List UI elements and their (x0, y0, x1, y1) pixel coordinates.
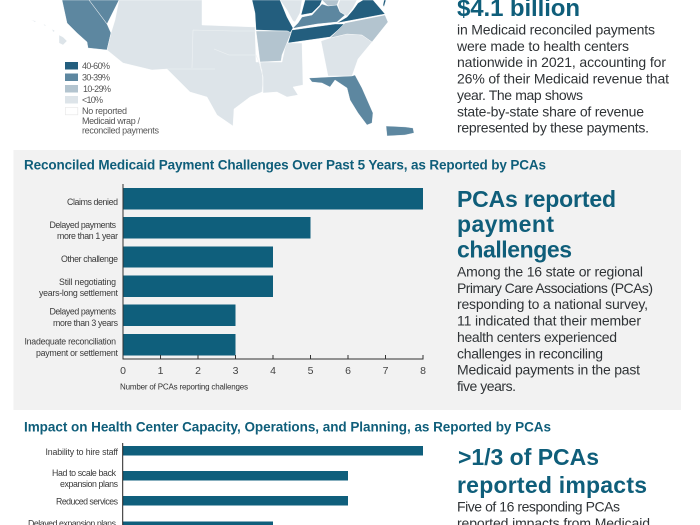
bar chart: impacts (28, 443, 423, 525)
axis numbers: 6 (345, 365, 351, 377)
callout heading (457, 444, 647, 498)
axis numbers: 8 (420, 365, 426, 377)
legend: no reported payments: Medicaid wrap / (82, 116, 140, 126)
category labels: Other challenge (61, 254, 118, 264)
callout body text: 26% of their Medicaid revenue that (457, 70, 669, 86)
map: Hawaii small islands (31, 20, 55, 32)
bars (123, 446, 423, 525)
category labels: Still negotiating (59, 277, 116, 287)
callout: $4.1 billion (456, 0, 669, 136)
bar chart: payment challenges (24, 184, 426, 392)
axis numbers: 7 (383, 365, 389, 377)
legend: map shares (65, 61, 160, 136)
map: western and southern low-share states (107, 0, 263, 126)
map: Virginia eastern shore (383, 0, 386, 7)
callout: PCAs reported payment challenges (457, 186, 653, 394)
callout body text: Primary Care Associations (PCAs) (457, 280, 653, 296)
category labels: more than 1 year (57, 231, 118, 241)
category labels (24, 197, 119, 358)
callout body text (457, 263, 653, 394)
callout body text: challenges in reconciling (457, 345, 603, 361)
map: Arkansas (256, 31, 291, 62)
map: North Carolina (330, 15, 388, 42)
callout heading: payment (457, 211, 554, 237)
axis numbers: 0 (120, 365, 126, 377)
category labels: payment or settlement (36, 348, 119, 358)
category labels: years-long settlement (39, 288, 119, 298)
heading: impact chart: Impact on Health Center Capacity, Operations, and Planning, as Reported by PCAs (24, 420, 551, 434)
map: Hawaii big island (59, 35, 67, 45)
axis numbers: 1 (158, 365, 164, 377)
callout body text: in Medicaid reconciled payments (457, 22, 655, 38)
legend: no reported payments (65, 106, 160, 136)
map: Kentucky (293, 4, 345, 28)
callout body text: state-by-state share of revenue (457, 103, 644, 119)
map: state share of revenue (31, 0, 414, 136)
callout body text: Among the 16 state or regional (457, 263, 643, 279)
category labels: more than 3 years (53, 318, 119, 328)
map: Illinois (280, 0, 302, 22)
callout heading: challenges (457, 236, 572, 262)
category labels: Reduced services (56, 496, 119, 506)
legend: no reported payments: No reported (82, 106, 127, 116)
axis numbers: 5 (308, 365, 314, 377)
callout body text: Medicaid payments in the past (457, 362, 640, 378)
callout body text: year. The map shows (457, 87, 583, 103)
axes and ticks (123, 184, 423, 359)
axis (122, 443, 124, 525)
callout body text (456, 22, 669, 136)
axis numbers (120, 365, 426, 377)
map: state borders (89, 0, 263, 92)
legend: 30-39%: 30-39% (82, 72, 110, 82)
category labels: Delayed payments (50, 306, 117, 316)
legend: 40-60%: 40-60% (82, 61, 110, 71)
axis numbers: 4 (270, 365, 276, 377)
map: Georgia and South Carolina (321, 34, 372, 76)
callout body text: represented by these payments. (457, 120, 649, 136)
heading: payment challenges chart: Reconciled Medicaid Payment Challenges Over Past 5 Years, as Reported by PCAs (24, 158, 546, 172)
category labels: Inability to hire staff (46, 447, 119, 457)
callout heading: PCAs reported (457, 186, 616, 212)
legend: no reported payments: reconciled payments (82, 126, 160, 136)
callout body text: were made to health centers (456, 38, 629, 54)
map: West Virginia (338, 0, 357, 16)
map: Ohio (322, 0, 339, 6)
category labels: Inadequate reconciliation (24, 337, 116, 347)
axis numbers: 3 (233, 365, 239, 377)
map: Florida (309, 75, 373, 125)
bars (123, 188, 423, 356)
map: Louisiana and Mississippi (260, 43, 303, 97)
callout heading (457, 186, 616, 262)
category labels: expansion plans (60, 479, 119, 489)
callout heading: reported impacts (457, 472, 647, 498)
map: Puerto Rico (386, 126, 414, 136)
axis numbers: 2 (195, 365, 201, 377)
callout heading: >1/3 of PCAs (458, 444, 599, 470)
callout body text (457, 499, 650, 525)
callout body text: five years. (457, 378, 516, 394)
callout body text: health centers experienced (457, 329, 617, 345)
panel: challenges background (14, 150, 681, 410)
legend: under 10%: <10% (82, 95, 103, 105)
map: Tennessee (288, 24, 345, 43)
map: Hawaii (31, 20, 67, 45)
map: Indiana (301, 0, 322, 15)
legend: 10-29%: 10-29% (83, 84, 111, 94)
category labels (28, 447, 119, 525)
callout: more than one third of PCAs (457, 444, 650, 525)
category labels: Claims denied (67, 197, 118, 207)
map: Virginia (337, 0, 385, 23)
callout body text: Five of 16 responding PCAs (457, 499, 620, 515)
callout body text: responding to a national survey, (457, 296, 648, 312)
callout body text: nationwide in 2021, accounting for (457, 54, 666, 70)
category labels: Delayed payments (50, 220, 117, 230)
callout body text: 11 indicated that their member (457, 312, 641, 328)
category labels: Had to scale back (52, 468, 117, 478)
map: California and Nevada (62, 0, 119, 50)
map: Missouri (252, 0, 293, 33)
axis title: Number of PCAs reporting challenges (120, 382, 248, 392)
